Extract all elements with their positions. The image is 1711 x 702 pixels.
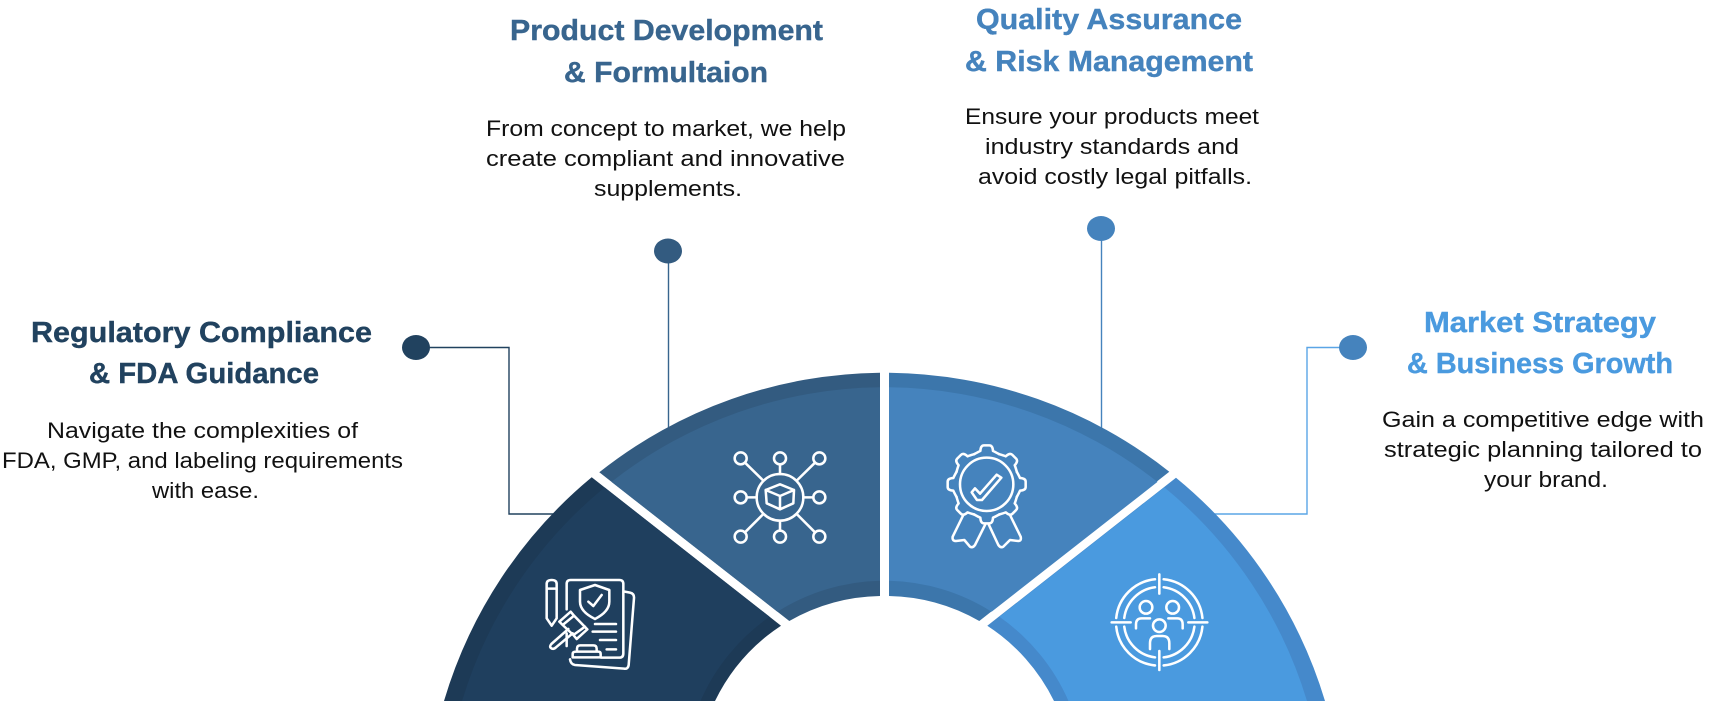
text: regulatory compliance description: FDA, GMP, and labeling requirements (2, 448, 403, 473)
dot: product development (654, 238, 682, 264)
text: regulatory compliance description: Navigate the complexities of (47, 418, 359, 443)
heading: product development: Product Development (510, 15, 823, 47)
text: quality assurance description (965, 104, 1260, 189)
icon: document, shield and gavel (547, 580, 634, 669)
dot: regulatory compliance (402, 335, 430, 360)
heading: product development (510, 15, 823, 89)
text: quality assurance description: Ensure your products meet (965, 104, 1260, 129)
segment: market strategy (987, 478, 1325, 701)
segment: regulatory compliance (444, 477, 781, 701)
text: product development description: create compliant and innovative (486, 146, 845, 171)
text: regulatory compliance description: with ease. (151, 478, 259, 503)
text: market strategy description: Gain a competitive edge with (1382, 407, 1704, 432)
text: quality assurance description: avoid costly legal pitfalls. (978, 164, 1252, 189)
text: market strategy description: strategic planning tailored to (1384, 437, 1702, 462)
heading: product development: & Formultaion (564, 57, 768, 89)
heading: quality assurance: & Risk Management (965, 46, 1253, 78)
heading: quality assurance: Quality Assurance (976, 4, 1242, 36)
dot: quality assurance (1087, 216, 1115, 241)
text: market strategy description (1382, 407, 1704, 492)
icon: award badge with check (948, 445, 1026, 547)
heading: market strategy: Market Strategy (1424, 307, 1656, 339)
heading: regulatory compliance: & FDA Guidance (89, 358, 319, 390)
heading: quality assurance (965, 4, 1253, 78)
icon: target with people (1112, 574, 1207, 670)
text: quality assurance description: industry standards and (985, 134, 1239, 159)
text: regulatory compliance description (2, 418, 403, 503)
dot: market strategy (1339, 335, 1367, 360)
text: market strategy description: your brand. (1484, 467, 1608, 492)
connector: product development (668, 251, 670, 428)
heading: regulatory compliance: Regulatory Compliance (31, 317, 372, 349)
heading: market strategy: & Business Growth (1407, 348, 1673, 380)
segment: quality assurance (889, 373, 1169, 621)
connector: regulatory compliance (416, 348, 556, 514)
heading: regulatory compliance (31, 317, 372, 390)
connector: quality assurance (1100, 228, 1102, 430)
text: product development description: From concept to market, we help (486, 116, 846, 141)
text: product development description (486, 116, 846, 201)
segment: product development (599, 373, 880, 621)
icon: network around a box (735, 452, 825, 543)
heading: market strategy (1407, 307, 1673, 380)
connector: market strategy (1212, 348, 1353, 514)
text: product development description: supplements. (594, 176, 742, 201)
